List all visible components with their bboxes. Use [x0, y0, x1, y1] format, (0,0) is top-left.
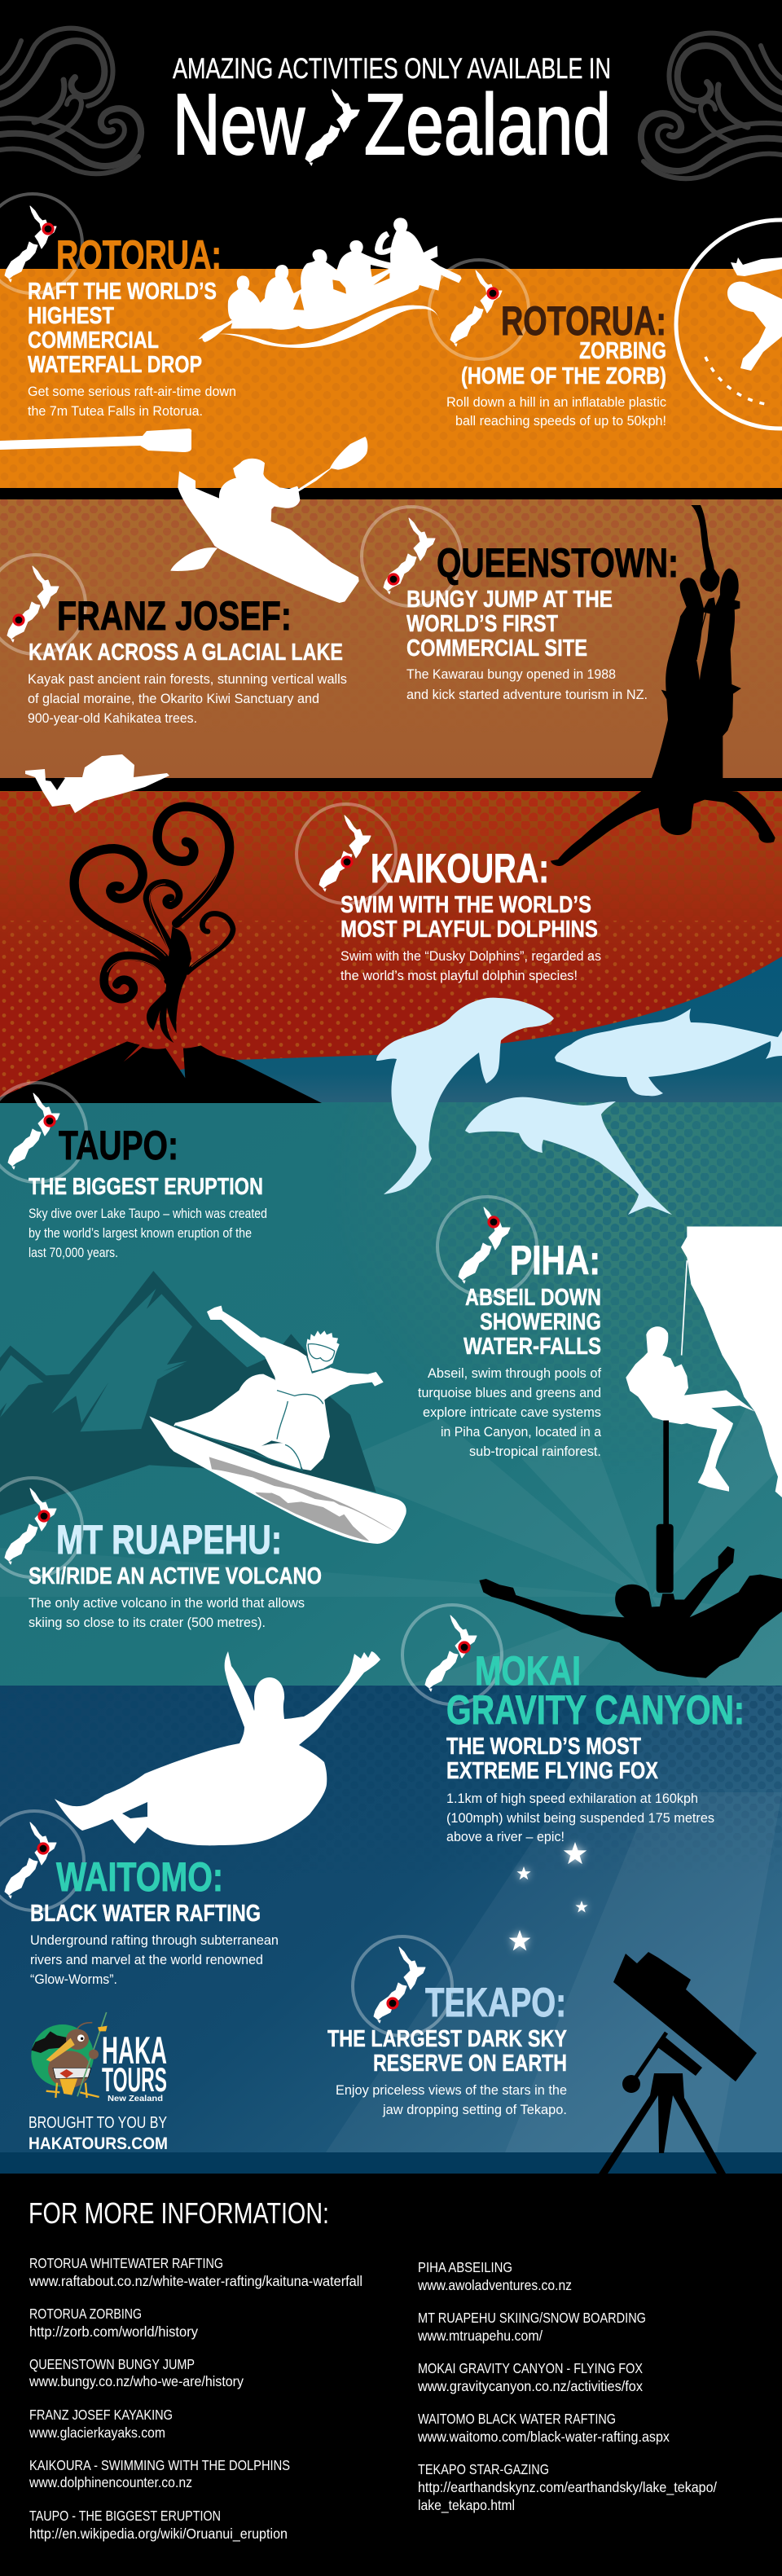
icon: location map: [297, 804, 396, 903]
panel: queenstown: [362, 507, 679, 702]
panel: mokai gravity canyon: [402, 1605, 745, 1844]
panel: for more information: [29, 2196, 717, 2543]
icon: location map: [353, 1936, 452, 2036]
illustration: zorb ball: [676, 220, 782, 429]
link list left: ROTORUA WHITEWATER RAFTING: [29, 2255, 223, 2271]
link list left: www.glacierkayaks.com: [29, 2424, 165, 2441]
body text: last 70,000 years.: [29, 1246, 118, 1260]
body text: Swim with the “Dusky Dolphins”, regarded as: [340, 949, 601, 964]
link list right: www.awoladventures.co.nz: [417, 2277, 572, 2293]
logo: haka tours: HAKA: [102, 2029, 167, 2072]
illustration: paddle: [0, 429, 191, 452]
icon: location map: [437, 1197, 537, 1296]
link list right: www.gravitycanyon.co.nz/activities/fox: [417, 2378, 643, 2394]
icon: location map: [402, 1605, 502, 1704]
body text: in Piha Canyon, located in a: [441, 1425, 602, 1440]
brought to you by: BROUGHT TO YOU BY: [29, 2114, 167, 2132]
heading: ROTORUA:: [56, 232, 222, 278]
subheading: [340, 892, 598, 943]
illustration: kayak: [170, 437, 367, 603]
body text: turquoise blues and greens and: [418, 1386, 601, 1400]
link list left: www.raftabout.co.nz/white-water-rafting/kaituna-waterfall: [29, 2273, 362, 2289]
illustration: bungy jumper: [551, 505, 775, 866]
icon: location map: [0, 1811, 84, 1910]
body text: jaw dropping setting of Tekapo.: [382, 2103, 567, 2117]
body text: [406, 667, 648, 702]
icon: location map: [0, 1083, 86, 1182]
body text: above a river – epic!: [446, 1830, 565, 1844]
subheading: ABSEIL DOWN: [465, 1285, 601, 1311]
body text: Underground rafting through subterranean: [30, 1933, 279, 1948]
body text: 1.1km of high speed exhilaration at 160kph: [446, 1791, 698, 1806]
title: AMAZING ACTIVITIES ONLY AVAILABLE IN: [173, 53, 611, 85]
illustration: skydiver: [25, 754, 169, 813]
body text: [446, 1791, 714, 1844]
illustration: abseiler on cliff: [626, 1226, 782, 1497]
body text: [418, 1366, 602, 1459]
panel: taupo: [0, 1083, 267, 1260]
body text: [30, 1933, 279, 1987]
subheading: ZORBING: [579, 338, 666, 364]
link list left: QUEENSTOWN BUNGY JUMP: [29, 2356, 195, 2372]
heading: FRANZ JOSEF:: [57, 593, 292, 639]
link list right: MT RUAPEHU SKIING/SNOW BOARDING: [418, 2310, 646, 2326]
body text: “Glow-Worms”.: [30, 1972, 117, 1987]
illustration: raft: [198, 218, 462, 348]
page background: [0, 269, 782, 2174]
subheading: THE LARGEST DARK SKY: [327, 2026, 567, 2052]
panel: tekapo: [327, 1936, 567, 2117]
heading: MT RUAPEHU:: [56, 1517, 282, 1563]
heading: TEKAPO:: [425, 1980, 566, 2025]
link list right: lake_tekapo.html: [418, 2497, 515, 2514]
subheading: BLACK WATER RAFTING: [30, 1901, 261, 1927]
koru decoration right: [641, 33, 782, 178]
heading: MOKAI: [475, 1648, 581, 1694]
link list left: TAUPO - THE BIGGEST ERUPTION: [29, 2508, 221, 2524]
body text: skiing so close to its crater (500 metres).: [29, 1615, 266, 1630]
subheading: [327, 2026, 567, 2077]
body text: Roll down a hill in an inflatable plastic: [446, 395, 666, 410]
subheading: RAFT THE WORLD’S: [28, 279, 217, 305]
link list left: FRANZ JOSEF KAYAKING: [29, 2407, 173, 2423]
body text: [28, 672, 347, 726]
body text: [28, 385, 236, 419]
link list right: http://earthandskynz.com/earthandsky/lake_tekapo/: [418, 2479, 717, 2496]
heading: [446, 1648, 745, 1733]
heading: KAIKOURA:: [371, 846, 549, 891]
body text: [446, 395, 666, 429]
subheading: BUNGY JUMP AT THE: [406, 587, 613, 613]
title: Zealand: [364, 77, 611, 173]
subheading: SHOWERING: [480, 1309, 601, 1335]
link list right: www.waitomo.com/black-water-rafting.aspx: [417, 2429, 670, 2445]
body text: [29, 1596, 305, 1630]
logo: haka tours: [31, 2012, 167, 2103]
body text: of glacial moraine, the Okarito Kiwi Sanctuary and: [28, 692, 319, 706]
subheading: MOST PLAYFUL DOLPHINS: [340, 917, 598, 943]
subheading: SKI/RIDE AN ACTIVE VOLCANO: [29, 1563, 322, 1589]
body text: [336, 2083, 567, 2117]
heading: PIHA:: [510, 1237, 600, 1283]
body text: and kick started adventure tourism in NZ.: [406, 688, 648, 702]
body text: [29, 1207, 267, 1260]
illustration: snowboarder: [149, 1306, 406, 1544]
body text: The Kawarau bungy opened in 1988: [406, 667, 616, 682]
subheading: WORLD’S FIRST: [406, 611, 558, 637]
link list left: [29, 2255, 362, 2543]
link list right: [417, 2259, 717, 2514]
body text: Get some serious raft-air-time down: [28, 385, 236, 399]
body text: sub-tropical rainforest.: [469, 1444, 601, 1459]
subheading: [28, 279, 217, 378]
subheading: (HOME OF THE ZORB): [461, 363, 666, 389]
body text: ball reaching speeds of up to 50kph!: [455, 414, 666, 429]
illustration: inner tube rider: [55, 1651, 380, 1845]
subheading: RESERVE ON EARTH: [373, 2051, 567, 2077]
icon: location map: [362, 507, 461, 606]
subheading: THE WORLD’S MOST: [446, 1734, 641, 1760]
brought to you by: HAKATOURS.COM: [29, 2134, 168, 2153]
icon: location map: [0, 194, 82, 293]
logo: haka tours: TOURS: [102, 2060, 167, 2099]
subheading: THE BIGGEST ERUPTION: [29, 1174, 263, 1200]
illustration: dolphins: [376, 998, 782, 1215]
subheading: [463, 1285, 601, 1360]
subheading: EXTREME FLYING FOX: [446, 1758, 658, 1784]
illustration: flying fox rider: [479, 1421, 782, 1678]
body text: Sky dive over Lake Taupo – which was created: [29, 1207, 267, 1221]
heading: ROTORUA:: [501, 298, 666, 344]
link list right: WAITOMO BLACK WATER RAFTING: [418, 2411, 616, 2427]
body text: [340, 949, 601, 983]
link list left: ROTORUA ZORBING: [29, 2306, 142, 2322]
link list right: www.mtruapehu.com/: [417, 2328, 543, 2344]
subheading: SWIM WITH THE WORLD’S: [340, 892, 591, 918]
body text: Kayak past ancient rain forests, stunning vertical walls: [28, 672, 347, 687]
panel: rotorua rafting: [0, 194, 462, 452]
subheading: [461, 338, 666, 389]
subheading: [406, 587, 613, 662]
panel: waitomo: [0, 1811, 279, 1987]
body text: 900-year-old Kahikatea trees.: [28, 711, 197, 726]
subheading: COMMERCIAL SITE: [406, 635, 587, 662]
subheading: KAYAK ACROSS A GLACIAL LAKE: [29, 640, 343, 666]
link list right: MOKAI GRAVITY CANYON - FLYING FOX: [418, 2360, 643, 2376]
illustration: mountains: [0, 1271, 376, 1515]
panel: kaikoura: [297, 804, 601, 983]
panel: piha: [418, 1197, 602, 1459]
subheading: WATER-FALLS: [463, 1334, 601, 1360]
title: New: [173, 77, 305, 173]
link list right: TEKAPO STAR-GAZING: [418, 2461, 549, 2477]
heading: TAUPO:: [59, 1123, 178, 1168]
body text: by the world’s largest known eruption of the: [29, 1226, 252, 1241]
subheading: HIGHEST: [28, 303, 114, 329]
link list left: http://en.wikipedia.org/wiki/Oruanui_eruption: [29, 2525, 288, 2543]
heading: WAITOMO:: [56, 1854, 223, 1900]
icon: location map: [0, 1478, 82, 1577]
subheading: [446, 1734, 658, 1784]
subheading: WATERFALL DROP: [28, 352, 202, 378]
icon: stars: [509, 1842, 588, 1950]
brought to you by: [29, 2114, 168, 2153]
link list left: KAIKOURA - SWIMMING WITH THE DOLPHINS: [29, 2457, 290, 2473]
body text: explore intricate cave systems: [423, 1405, 601, 1420]
body text: The only active volcano in the world that allows: [29, 1596, 305, 1611]
illustration: telescope: [599, 1952, 757, 2174]
link list left: www.bungy.co.nz/who-we-are/history: [29, 2373, 244, 2389]
logo: haka tours: New Zealand: [108, 2095, 163, 2103]
subheading: COMMERCIAL: [28, 327, 159, 354]
panel: mt ruapehu: [0, 1478, 322, 1630]
link list left: www.dolphinencounter.co.nz: [29, 2474, 192, 2490]
link list left: http://zorb.com/world/history: [29, 2323, 198, 2340]
panel: franz josef: [0, 555, 347, 726]
heading: FOR MORE INFORMATION:: [29, 2196, 329, 2230]
icon: location map: [429, 260, 529, 359]
koru decoration left: [0, 29, 141, 174]
body text: the world’s most playful dolphin species!: [340, 969, 578, 983]
body text: Enjoy priceless views of the stars in the: [336, 2083, 567, 2098]
body text: the 7m Tutea Falls in Rotorua.: [28, 404, 203, 419]
heading: QUEENSTOWN:: [437, 540, 679, 586]
body text: (100mph) whilst being suspended 175 metres: [446, 1811, 714, 1826]
body text: Abseil, swim through pools of: [428, 1366, 601, 1381]
body text: rivers and marvel at the world renowned: [30, 1953, 263, 1967]
illustration: volcano and plume: [0, 807, 322, 1103]
panel: rotorua zorbing: [429, 220, 782, 429]
link list right: PIHA ABSEILING: [418, 2259, 512, 2275]
icon: location map: [0, 555, 86, 654]
title: [173, 53, 611, 173]
